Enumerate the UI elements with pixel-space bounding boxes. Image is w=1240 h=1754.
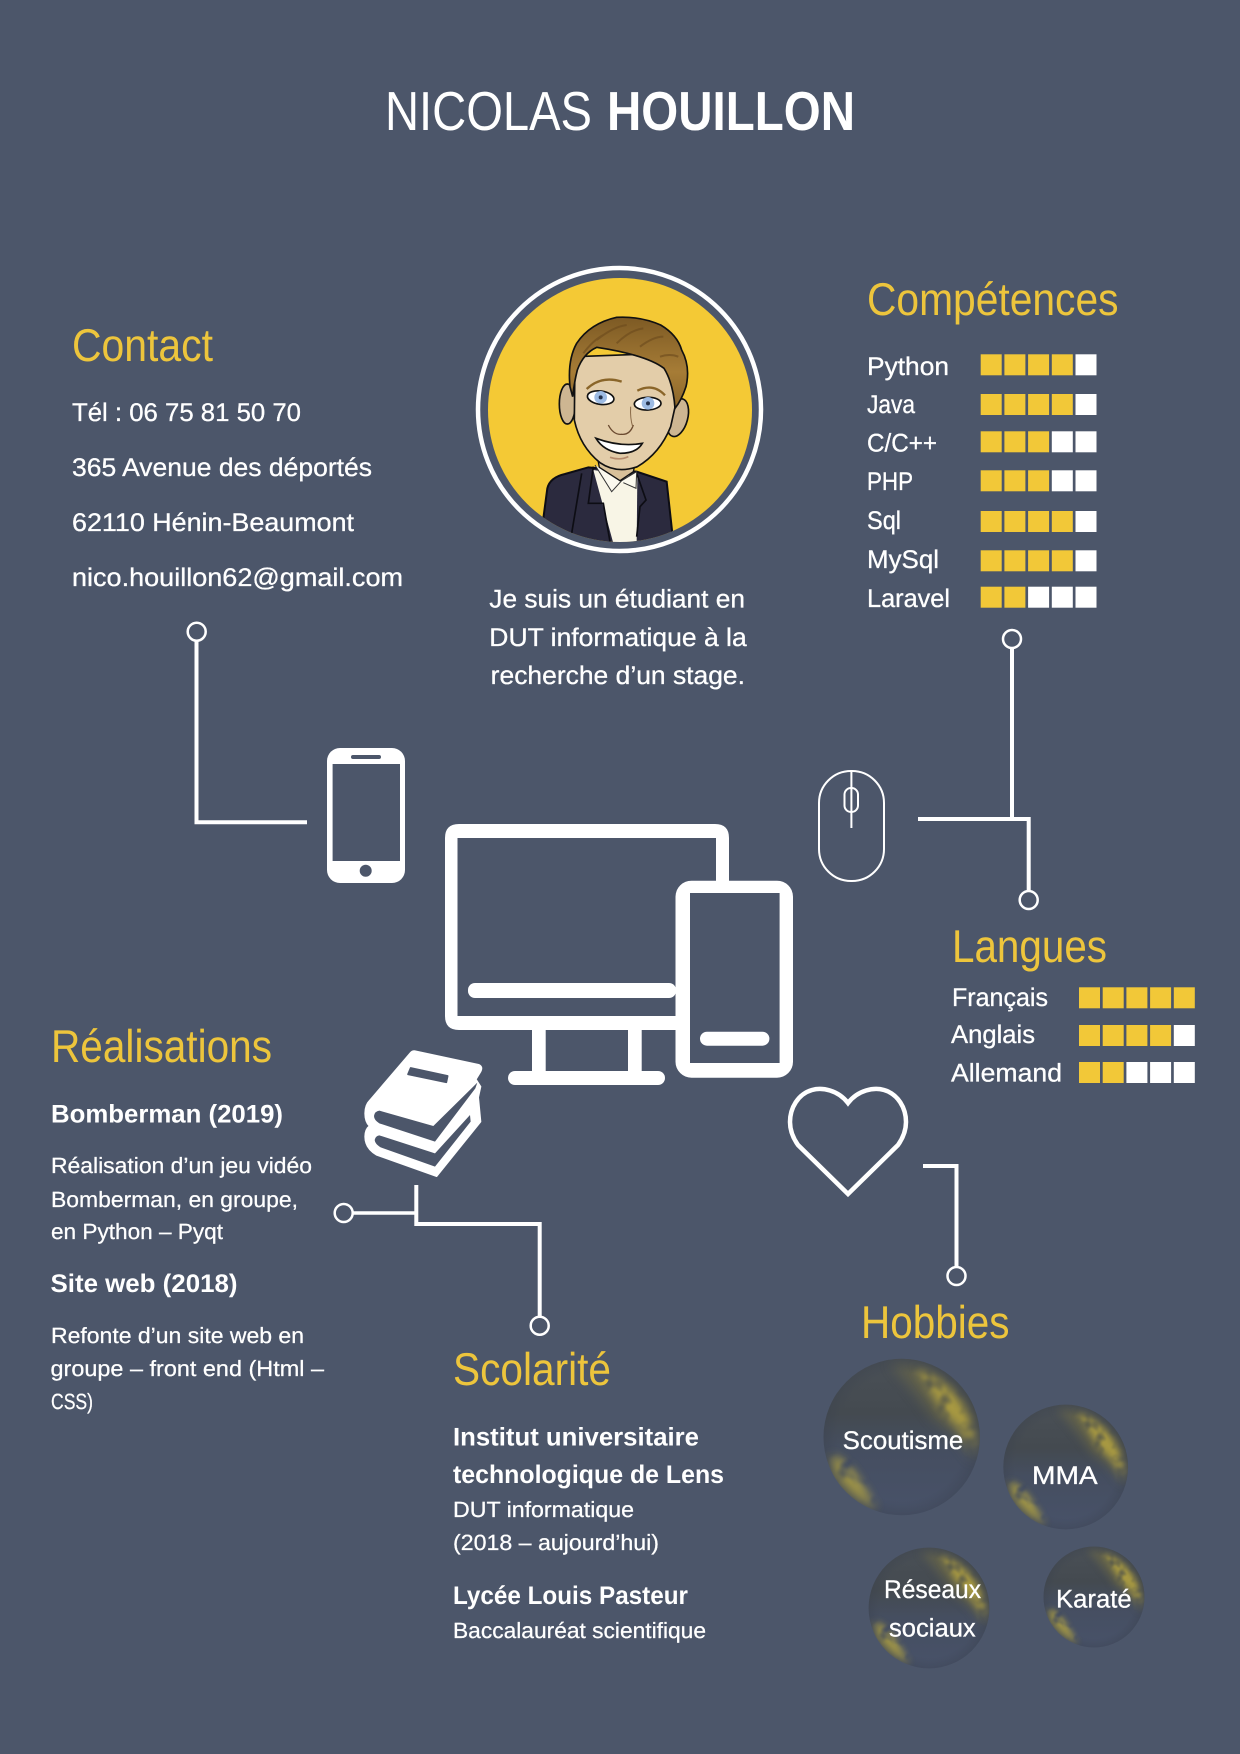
school: IUT de Lens: technologique de Lens xyxy=(453,1461,724,1489)
project: site web: CSS) xyxy=(51,1389,93,1414)
school: IUT de Lens: DUT informatique xyxy=(453,1497,634,1522)
contact details xyxy=(72,399,403,592)
skill: C/C++: C/C++ xyxy=(867,430,937,458)
skill: Java xyxy=(867,391,1096,419)
project: Bomberman: Réalisation d’un jeu vidéo xyxy=(51,1153,312,1178)
skill: Laravel: Laravel xyxy=(867,585,950,613)
skill: Python: Python xyxy=(867,353,949,381)
intro text: Je suis un étudiant en xyxy=(489,586,745,614)
connector: books to réalisations and scolarité xyxy=(335,1185,549,1335)
heading: hobbies: Hobbies xyxy=(861,1296,1010,1348)
skill: PHP: PHP xyxy=(867,468,913,496)
skill: Python xyxy=(867,353,1096,381)
language: Français: Français xyxy=(952,984,1048,1012)
skill: Sql: Sql xyxy=(867,507,901,535)
language: Anglais: Anglais xyxy=(951,1021,1035,1049)
school: lycée Louis Pasteur: Lycée Louis Pasteur xyxy=(453,1582,688,1610)
bubble: Réseaux sociaux xyxy=(869,1548,989,1668)
icon: heart xyxy=(790,1089,906,1194)
title: HOUILLON xyxy=(607,80,855,142)
bubble: Réseaux sociaux: Réseaux xyxy=(884,1576,981,1604)
skill: Sql xyxy=(867,507,1096,535)
heading: contact: Contact xyxy=(72,319,213,371)
skill: Laravel xyxy=(867,585,1096,613)
panel: langues xyxy=(951,920,1195,1088)
connector: mouse to compétences and langues xyxy=(918,630,1038,909)
school: IUT de Lens: Institut universitaire xyxy=(453,1423,699,1451)
project: Bomberman: en Python – Pyqt xyxy=(51,1219,223,1244)
contact details: nico.houillon62@gmail.com xyxy=(72,564,403,592)
panel: contact xyxy=(72,319,403,592)
icon: books xyxy=(365,1051,482,1176)
language: Anglais xyxy=(951,1021,1195,1049)
contact details: 62110 Hénin-Beaumont xyxy=(72,509,354,537)
heading: scolarité: Scolarité xyxy=(453,1343,611,1395)
title xyxy=(385,80,855,142)
project: Bomberman: Bomberman (2019) xyxy=(51,1101,283,1129)
language: Français xyxy=(952,984,1195,1012)
monitor xyxy=(445,824,729,1085)
project: Bomberman: Bomberman, en groupe, xyxy=(51,1187,298,1212)
panel: scolarité xyxy=(453,1343,724,1643)
school: lycée Louis Pasteur xyxy=(453,1582,706,1643)
project: site web: Refonte d’un site web en xyxy=(51,1323,304,1348)
heading: compétences: Compétences xyxy=(867,273,1118,325)
intro text xyxy=(489,586,748,690)
school: lycée Louis Pasteur: Baccalauréat scientifique xyxy=(453,1618,706,1643)
project: site web: Site web (2018) xyxy=(50,1270,238,1298)
skill: Java: Java xyxy=(867,391,916,419)
bubble: MMA xyxy=(1003,1405,1128,1529)
avatar portrait xyxy=(478,268,761,573)
language: Allemand: Allemand xyxy=(951,1060,1062,1088)
bubble: Karaté xyxy=(1044,1547,1144,1647)
skill: C/C++ xyxy=(867,430,1096,458)
icon: phone xyxy=(327,748,405,883)
title: NICOLAS xyxy=(385,80,592,142)
connector: contact to phone xyxy=(188,623,307,822)
heading: langues: Langues xyxy=(952,920,1107,972)
skill: MySql xyxy=(867,546,1096,574)
contact details: 365 Avenue des déportés xyxy=(72,454,372,482)
portrait ring xyxy=(478,268,761,551)
language: Allemand xyxy=(951,1060,1195,1088)
portrait disc xyxy=(488,278,752,542)
icon: mouse xyxy=(819,771,884,881)
panel: hobbies xyxy=(823,1296,1144,1668)
bubble: Réseaux sociaux: sociaux xyxy=(889,1615,976,1643)
bubble: Scoutisme: Scoutisme xyxy=(843,1427,963,1455)
project: site web xyxy=(50,1270,325,1414)
tower xyxy=(676,881,793,1078)
bubble: Karaté: Karaté xyxy=(1056,1586,1132,1614)
intro text: DUT informatique à la xyxy=(489,624,748,652)
bubble: Scoutisme xyxy=(823,1359,980,1515)
connector: heart to hobbies xyxy=(923,1166,966,1285)
panel: réalisations xyxy=(50,1020,325,1414)
icon: computer and tower xyxy=(445,824,793,1085)
project: site web: groupe – front end (Html – xyxy=(50,1356,325,1381)
heading: réalisations: Réalisations xyxy=(51,1020,272,1072)
skill: PHP xyxy=(867,468,1096,496)
skill: MySql: MySql xyxy=(867,546,939,574)
bubble: MMA: MMA xyxy=(1032,1462,1098,1490)
contact details: Tél : 06 75 81 50 70 xyxy=(72,399,301,427)
intro text: recherche d’un stage. xyxy=(491,662,745,690)
school: IUT de Lens: (2018 – aujourd’hui) xyxy=(453,1530,659,1555)
school: IUT de Lens xyxy=(453,1423,724,1555)
bitmoji character xyxy=(542,316,690,542)
panel: compétences xyxy=(867,273,1118,613)
project: Bomberman xyxy=(51,1101,312,1244)
